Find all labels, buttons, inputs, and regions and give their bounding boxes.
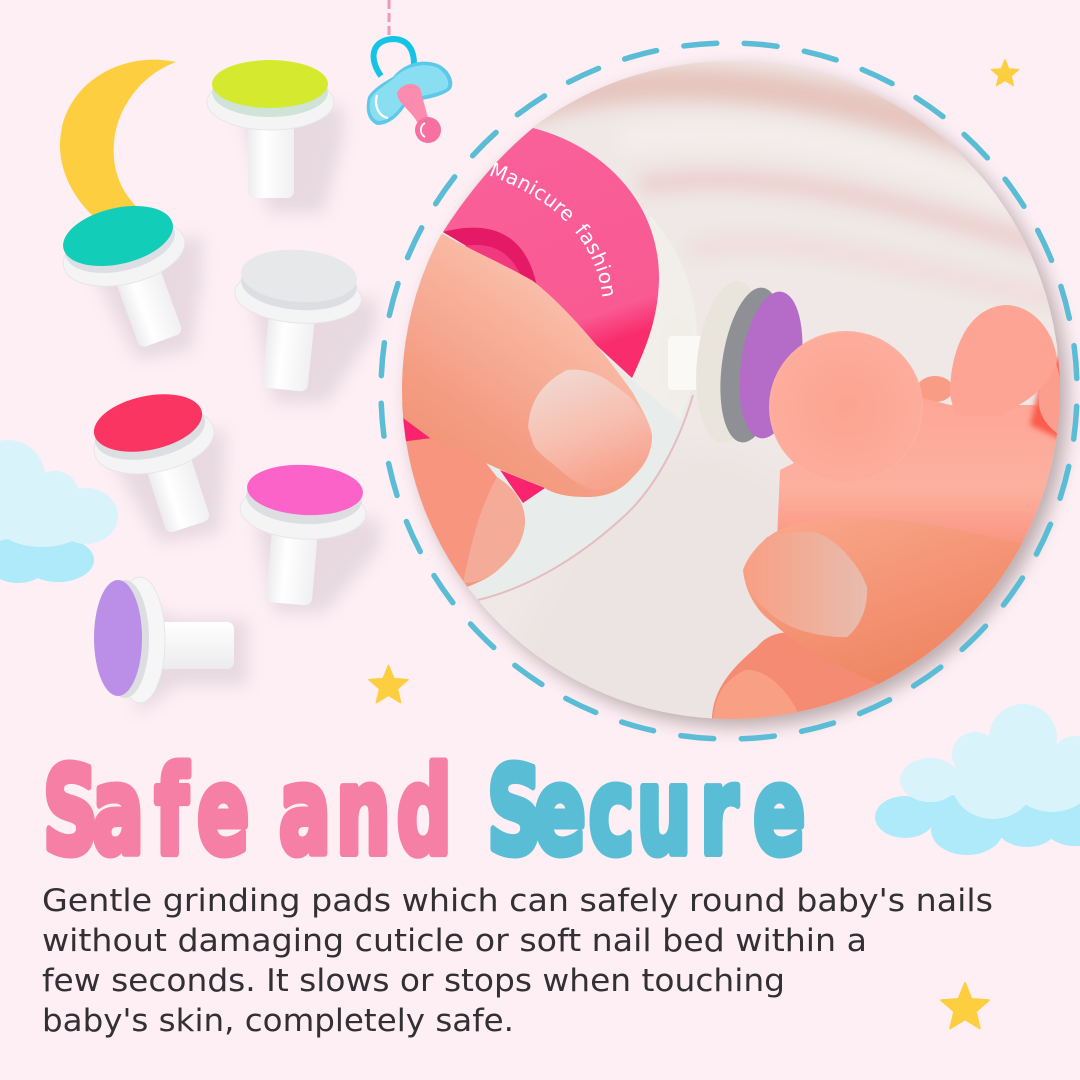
adult thumb lower finger — [712, 632, 886, 719]
lower holding finger — [395, 400, 525, 587]
baby big toe — [769, 331, 923, 463]
body text: without damaging cuticle or soft nail bed within a — [42, 923, 867, 959]
baby foot — [777, 398, 1062, 560]
trimmer pink corner — [403, 418, 431, 442]
trimmer collar — [658, 315, 694, 401]
purple grinding pad — [740, 292, 802, 438]
grinding pad holder — [696, 282, 752, 442]
icon: pacifier string — [388, 0, 390, 40]
nail pad: teal — [57, 196, 202, 360]
grinding pad rim — [720, 288, 772, 442]
index finger holding trimmer — [395, 234, 652, 497]
adult thumb — [743, 519, 1030, 685]
nail pad: red — [88, 385, 225, 543]
blurred lower surface — [470, 451, 800, 730]
baby small toe — [919, 376, 950, 402]
cloud: left — [0, 440, 118, 583]
baby toe 2 — [950, 305, 1057, 416]
trimmer upper body — [630, 215, 697, 420]
nail pad: pink — [239, 462, 380, 613]
icon: crescent moon — [60, 60, 176, 222]
body text: few seconds. It slows or stops when touching — [42, 963, 785, 999]
title: Secure: Secure — [487, 741, 805, 882]
baby toe 3 shadow — [1030, 350, 1062, 440]
nail pad: white — [233, 246, 377, 403]
photo shadow — [410, 69, 1068, 727]
nail pad: purple — [94, 577, 248, 715]
trimmer pink face — [443, 128, 659, 378]
photo background — [400, 60, 1062, 722]
blurred blanket stripes — [520, 84, 1070, 300]
body text: Gentle grinding pads which can safely round baby's nails — [42, 883, 993, 919]
star: top right — [991, 60, 1019, 86]
baby toe 3 — [1038, 364, 1060, 433]
body text: baby's skin, completely safe. — [42, 1003, 514, 1039]
star: center — [369, 666, 408, 703]
lower fingernail — [713, 670, 798, 719]
trimmer label: Manicure fashion — [490, 162, 613, 296]
photo: nail trimmer on baby's fingers — [402, 61, 1060, 719]
nail pad: lime — [207, 60, 344, 213]
trimmer pink sliver — [500, 470, 545, 503]
title: Safe and: Safe and — [43, 741, 452, 882]
trimmer label path — [488, 175, 606, 320]
trimmer button inner — [465, 245, 520, 274]
body text — [42, 883, 993, 1039]
thumbnail — [747, 532, 867, 637]
index fingernail — [528, 370, 652, 489]
trimmer pink button — [443, 228, 537, 287]
trimmer white body — [582, 472, 658, 549]
trimmer rim — [478, 395, 693, 600]
dashed ring — [366, 28, 1080, 754]
star: bottom right — [941, 983, 989, 1028]
icon: pacifier — [367, 39, 452, 143]
lower holding fingernail — [463, 477, 525, 583]
trimmer shaft — [668, 336, 701, 390]
cloud: right — [875, 704, 1080, 855]
